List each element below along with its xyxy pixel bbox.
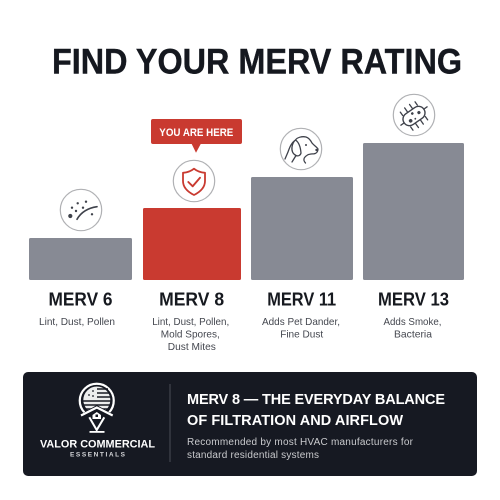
label: MERV 11: MERV 11: [267, 289, 336, 309]
label: MERV 8: Mold Spores,: [161, 328, 220, 340]
label: MERV 6: MERV 6: [48, 289, 112, 309]
label: MERV 11: [262, 289, 340, 340]
logo: Valor Commercial Essentials: ESSENTIALS: [70, 452, 126, 458]
icon: bacteria: [393, 94, 435, 136]
label: MERV 13: Bacteria: [394, 328, 432, 340]
icon: dust particles: [60, 189, 102, 231]
bar: MERV 8: [143, 208, 241, 280]
callout: you are here: [151, 119, 242, 153]
label: MERV 13: MERV 13: [378, 289, 449, 309]
panel: recommendation: standard residential systems: [187, 450, 319, 461]
label: MERV 6: Lint, Dust, Pollen: [39, 316, 115, 328]
bar: MERV 6: [29, 238, 132, 280]
logo: Valor Commercial Essentials: VALOR COMMERCIAL: [40, 439, 155, 451]
description: Recommended by most HVAC manufacturers for: [187, 437, 414, 448]
panel: recommendation: OF FILTRATION AND AIRFLOW: [187, 413, 403, 429]
label: MERV 8: MERV 8: [159, 289, 224, 309]
panel: recommendation: [23, 372, 477, 476]
label: MERV 8: Dust Mites: [168, 341, 216, 353]
icon: shield with check: [173, 160, 215, 202]
label: MERV 8: Lint, Dust, Pollen,: [152, 316, 229, 328]
divider: [170, 384, 171, 462]
title: FIND YOUR MERV RATING: [52, 42, 462, 81]
label: MERV 8: [152, 289, 229, 353]
logo: Valor Commercial Essentials: [40, 384, 155, 458]
heading: MERV 8 — THE EVERYDAY BALANCE: [187, 392, 445, 408]
label: MERV 11: Adds Pet Dander,: [262, 316, 340, 328]
label: MERV 13: [378, 289, 449, 340]
label: MERV 13: Adds Smoke,: [384, 316, 442, 328]
label: MERV 6: [39, 289, 115, 328]
callout: you are here: YOU ARE HERE: [159, 127, 233, 139]
bar: MERV 11: [251, 177, 353, 280]
label: MERV 11: Fine Dust: [280, 328, 323, 340]
bar: MERV 13: [363, 143, 464, 280]
icon: dog: [280, 128, 322, 170]
